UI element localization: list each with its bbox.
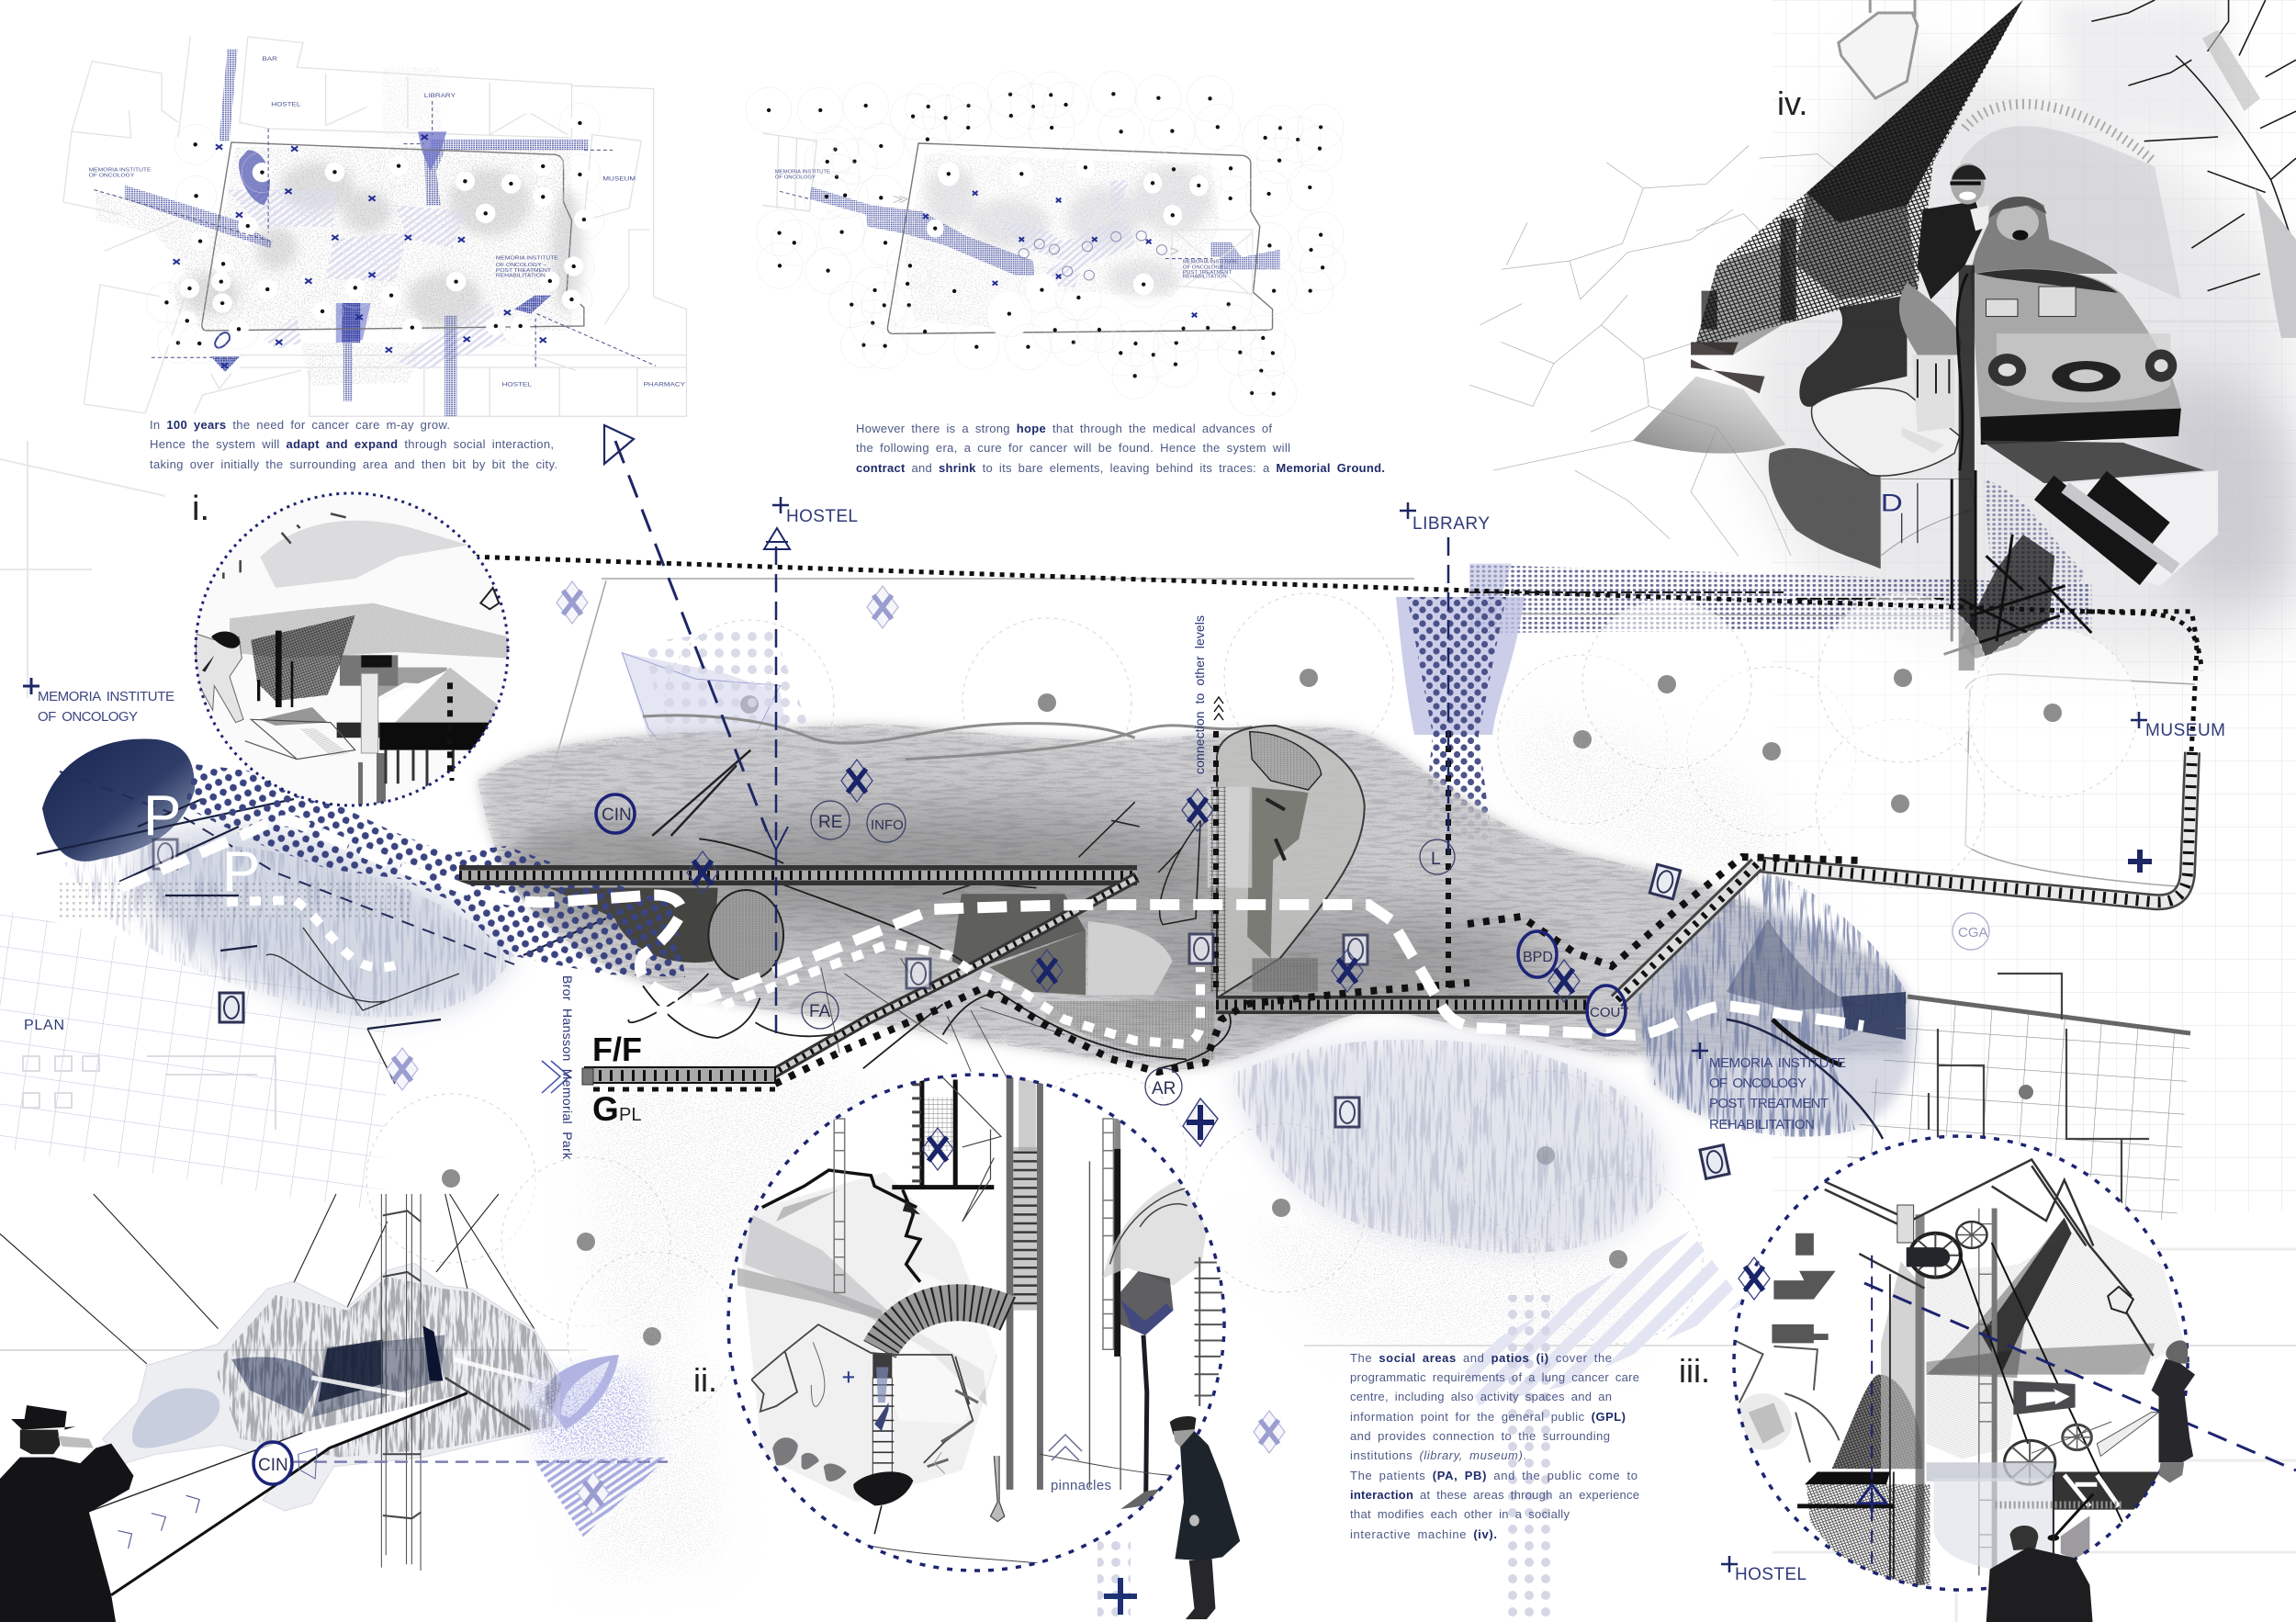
top-right collage: machine iv <box>1469 0 2296 670</box>
lavender speckle near arrows <box>643 625 808 827</box>
plan label: PLAN <box>24 1018 64 1033</box>
blue haze: below band and entrance <box>37 738 1916 1253</box>
label: ii: ii. <box>693 1361 717 1399</box>
bottom-left mesh volume and tower <box>0 1194 668 1595</box>
chevrons: to other levels <box>1214 697 1223 720</box>
text block: social areas: information point for the general public (GPL) <box>1350 1410 1626 1424</box>
round programme tags: BPD <box>1523 950 1553 965</box>
label HOSTEL bottom <box>1721 1556 1806 1584</box>
label: iii: iii. <box>1679 1352 1710 1390</box>
CIN tag bottom-left: CIN <box>258 1456 288 1475</box>
text block: expansion: In 100 years the need for cancer care m-ay grow. <box>150 418 450 432</box>
label MEMORIA POST TREATMENT REHABILITATION: MEMORIA INSTITUTE <box>1709 1055 1846 1071</box>
white dashed route PA <box>121 821 1863 1035</box>
plan drawing: 100 years expansion: HOSTEL <box>502 382 532 388</box>
plan drawing: 100 years expansion: PHARMACY <box>644 382 685 388</box>
plan drawing: memorial ground contraction: OF ONCOLOGY <box>775 175 816 180</box>
round programme tags: AR <box>1152 1079 1176 1098</box>
plan drawing: 100 years expansion: MEMORIA INSTITUTE <box>496 256 558 261</box>
text block: social areas: The patients (PA, PB) and the public come to <box>1350 1469 1638 1482</box>
plan drawing: memorial ground contraction: REHABILITATION <box>1183 275 1227 279</box>
standing man, centre <box>1170 1416 1240 1619</box>
text block: social areas: programmatic requirements of a lung cancer care <box>1350 1370 1639 1384</box>
space markers: X diamonds <box>387 760 1580 1453</box>
patient labels PA PB: P <box>143 784 181 848</box>
round programme tags: L <box>1431 850 1441 869</box>
plan drawing: 100 years expansion: OF ONCOLOGY <box>89 174 134 178</box>
cross marker right <box>2128 850 2152 873</box>
label MEMORIA INSTITUTE OF ONCOLOGY: MEMORIA INSTITUTE <box>38 689 174 704</box>
round programme tags: INFO <box>871 817 904 833</box>
text block: social areas: and provides connection to the surrounding <box>1350 1429 1610 1443</box>
plan drawing: memorial ground contraction: OF ONCOLOGY – <box>1183 265 1229 270</box>
label MUSEUM: MUSEUM <box>2145 721 2225 740</box>
label: i: i. <box>192 490 209 528</box>
lavender hatch ground <box>1097 1231 1745 1622</box>
round programme tags: COUT <box>1590 1005 1629 1020</box>
lavender speckle below mesh <box>523 1369 652 1460</box>
plan drawing: memorial ground contraction: POST TREATMENT <box>1183 270 1232 276</box>
label HOSTEL <box>772 497 858 526</box>
patient labels PA PB: B <box>262 875 274 895</box>
patient labels PA PB <box>143 784 274 904</box>
pale connectors: top markers and halftone to library <box>557 581 1525 845</box>
text block: social areas: The social areas and patios (i) cover the <box>1350 1351 1612 1365</box>
marker X at circle iii <box>1739 1257 1770 1300</box>
plan drawing: memorial ground contraction <box>746 71 1345 417</box>
faint grid: right side <box>1745 0 2296 1622</box>
rails and dotted routes <box>414 551 2197 1084</box>
text block: contraction: However there is a strong hope that through the medical advances of <box>856 422 1272 435</box>
CIN tag bottom-left <box>253 1442 292 1484</box>
label MEMORIA POST TREATMENT REHABILITATION: POST TREATMENT <box>1709 1096 1829 1111</box>
vertical label: connection to other levels: connection to other levels <box>1192 615 1207 774</box>
halftone patient route <box>185 764 685 977</box>
dashed line crossing circle iii <box>1864 1283 2296 1470</box>
label HOSTEL bottom: HOSTEL <box>1735 1565 1806 1584</box>
network threads left of wedge <box>1469 145 1839 556</box>
plan drawing: 100 years expansion <box>63 37 686 416</box>
plan drawing: memorial ground contraction: MEMORIA INSTITUTE <box>775 170 830 175</box>
text block: expansion: Hence the system will adapt and expand through social interaction, <box>150 437 554 451</box>
round programme tags: CIN <box>602 805 632 825</box>
text block: contraction: contract and shrink to its bare elements, leaving behind its traces: a Memorial Ground. <box>856 461 1385 475</box>
plan drawing: 100 years expansion: MUSEUM <box>602 176 636 182</box>
lavender X marker <box>578 1472 609 1515</box>
man seen from behind, bottom <box>1986 1526 2093 1622</box>
text block: contraction <box>856 422 1385 475</box>
white dotted route PB <box>227 900 1200 1044</box>
plan drawing: 100 years expansion: HOSTEL <box>271 101 300 107</box>
man reading, right <box>2152 1340 2195 1483</box>
text block: expansion <box>150 418 557 471</box>
plan drawing: memorial ground contraction: MEMORIA INSTITUTE <box>1183 260 1238 265</box>
plan drawing: 100 years expansion: LIBRARY <box>424 93 456 99</box>
vertical label: Bror Hansson Memorial Park: Bror Hansson Memorial Park <box>560 975 575 1160</box>
patient labels PA PB: A <box>181 827 194 847</box>
text block: social areas: centre, including also activity spaces and an <box>1350 1390 1612 1403</box>
circle ii: patio collage <box>728 1075 1224 1571</box>
text block: social areas: institutions (library, museum). <box>1350 1448 1526 1462</box>
plan drawing: 100 years expansion: POST TREATMENT <box>496 269 551 274</box>
ground floor rail with F/F and GPL labels <box>542 1031 775 1128</box>
text block: social areas: that modifies each other in a socially <box>1350 1507 1570 1521</box>
plus marker under circle ii <box>1104 1578 1137 1615</box>
label HOSTEL: HOSTEL <box>786 507 858 526</box>
label: iv: iv. <box>1777 84 1807 122</box>
round programme tags: RE <box>818 813 842 832</box>
text block: expansion: taking over initially the surrounding area and then bit by bit the city. <box>150 457 557 471</box>
central band: grey mesh <box>459 707 1929 1081</box>
text block: social areas: interaction at these areas through an experience <box>1350 1488 1639 1502</box>
ground floor rail with F/F and GPL labels: G <box>592 1090 619 1128</box>
ground floor rail with F/F and GPL labels: PL <box>619 1105 641 1125</box>
text block: social areas <box>1350 1351 1639 1541</box>
round programme tags: FA <box>809 1002 831 1021</box>
site outline lines <box>0 579 2296 1350</box>
label pinnacles with caret <box>1049 1435 1111 1493</box>
text block: contraction: the following era, a cure for cancer will be found. Hence the system will <box>856 441 1290 455</box>
right building plan <box>1837 974 2190 1222</box>
plan drawing: 100 years expansion: BAR <box>262 56 277 62</box>
plan drawing: 100 years expansion: OF ONCOLOGY – <box>496 264 547 268</box>
circle i: social area collage <box>196 493 508 817</box>
patient labels PA PB: P <box>222 840 260 904</box>
faint grid: left side and plan sheet <box>0 441 588 1350</box>
label pinnacles with caret: pinnacles <box>1051 1478 1111 1493</box>
label MEMORIA POST TREATMENT REHABILITATION: REHABILITATION <box>1709 1117 1815 1132</box>
ground floor rail with F/F and GPL labels: F/F <box>592 1031 642 1068</box>
dashed arrows and markers <box>604 425 1448 1038</box>
label MEMORIA POST TREATMENT REHABILITATION <box>1692 1042 1846 1132</box>
label LIBRARY: LIBRARY <box>1412 514 1490 534</box>
round programme tags <box>596 794 1989 1105</box>
plan drawing: 100 years expansion: REHABILITATION <box>496 274 546 278</box>
plan drawing: 100 years expansion: MEMORIA INSTITUTE <box>89 168 152 173</box>
label MUSEUM <box>2131 712 2225 740</box>
tree circles around the band <box>366 593 2137 1421</box>
X marker in circle ii <box>922 1128 953 1170</box>
small boxes along the route <box>906 864 1729 1178</box>
label MEMORIA POST TREATMENT REHABILITATION: OF ONCOLOGY <box>1709 1076 1806 1091</box>
label MEMORIA INSTITUTE OF ONCOLOGY <box>23 678 174 725</box>
round programme tags: CGA <box>1958 925 1988 941</box>
label LIBRARY <box>1400 502 1490 534</box>
text block: social areas: interactive machine (iv). <box>1350 1527 1497 1541</box>
label MEMORIA INSTITUTE OF ONCOLOGY: OF ONCOLOGY <box>38 709 138 725</box>
top-right collage: machine iv: D <box>1881 490 1903 517</box>
circle iii: machine collage <box>1734 1136 2188 1590</box>
speckled terrain <box>551 698 1837 1580</box>
man with hat, bottom left <box>0 1405 133 1622</box>
